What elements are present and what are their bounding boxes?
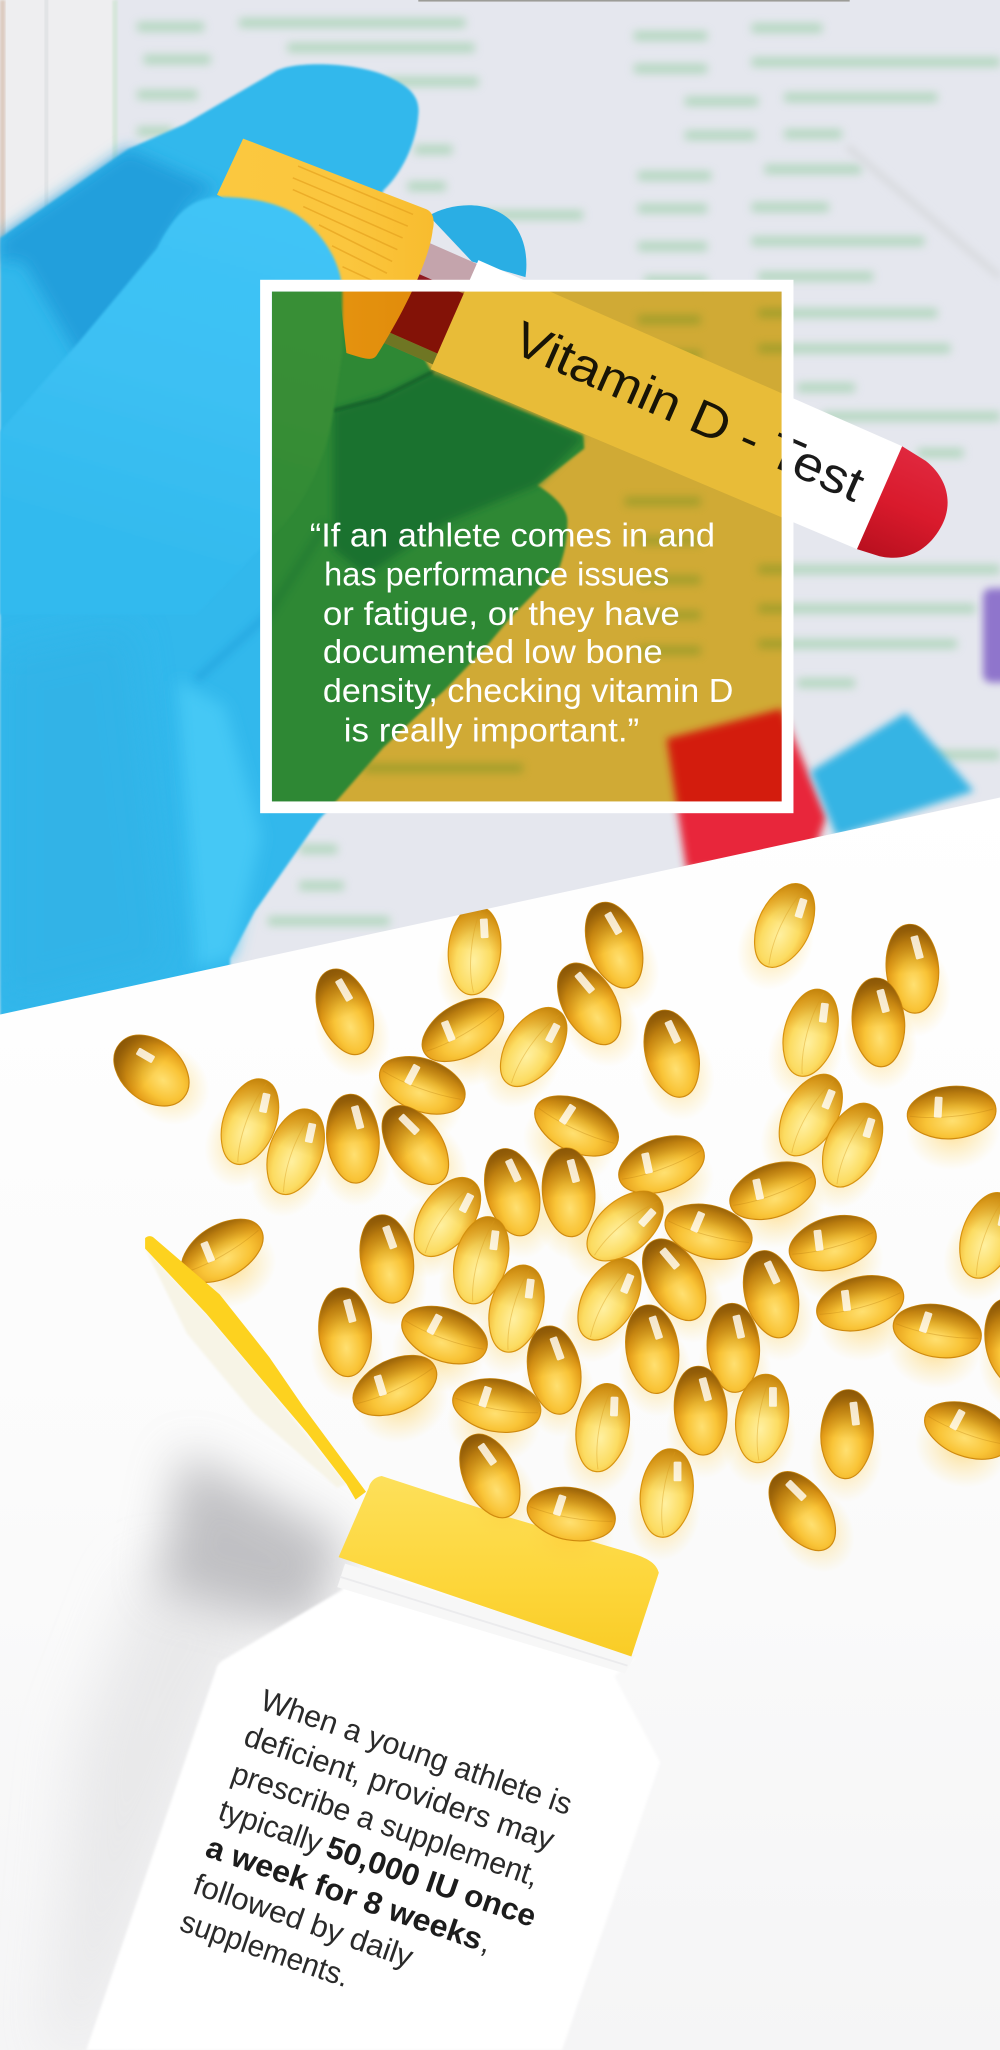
label text: Vitamin D - Test: [505, 312, 872, 513]
red tube end: [857, 446, 948, 558]
test tube with label: [384, 243, 948, 558]
glove shading: folds and highlights: [0, 149, 583, 1009]
quote text: or fatigue, or they have: [323, 596, 680, 633]
bottle body: [86, 1566, 660, 2050]
bottom panel: white surface: [0, 784, 1000, 2050]
vitamin D capsules: [95, 870, 1000, 1588]
top edge strip: [418, 0, 850, 2]
blue gloved hand: [0, 64, 584, 1020]
left paper margin: [0, 0, 118, 392]
quote text: is really important.”: [344, 712, 639, 749]
red tube cap: [667, 709, 826, 869]
quote text: has performance issues: [324, 557, 669, 594]
quote text: [310, 517, 733, 749]
thumb over cap: [0, 197, 342, 614]
back finger behind tube: [429, 205, 526, 277]
lab report background: [115, 0, 1000, 964]
bottle label text: When a young athlete is: [256, 1682, 577, 1822]
bottle label text: prescribe a supplement,: [227, 1755, 544, 1893]
bottle neck ridges: [337, 1564, 635, 1673]
bottle label text: typically: [214, 1792, 328, 1860]
bottle shadow on surface: [52, 1451, 345, 2050]
white tube label: [431, 260, 902, 555]
quote text: documented low bone: [323, 634, 663, 671]
vitamin D bottle with yellow cap: [86, 1476, 660, 2050]
yellow tube cap: [217, 139, 434, 359]
yellow multiply overlay in quote box: [272, 292, 782, 803]
glass and blood: [384, 243, 477, 364]
bottle label text: supplements.: [176, 1903, 354, 1994]
top panel: lab photo clipped by diagonal: [0, 0, 1000, 1020]
quote text: density, checking vitamin D: [323, 673, 733, 710]
purple tube cap: [983, 588, 1000, 682]
quote text: “If an athlete comes in and: [310, 517, 715, 554]
bottle label text: 50,000 IU once: [322, 1829, 541, 1934]
bottle label text: [176, 1681, 579, 2045]
quote box white frame: [266, 286, 788, 807]
bottle cap: [339, 1476, 659, 1656]
open cap lid flap: [145, 1236, 366, 1500]
cap ridges: [293, 166, 413, 285]
bottle label text: a week for 8 weeks: [202, 1829, 487, 1957]
bottle label text: followed by daily: [189, 1866, 418, 1975]
blurred green report rows: [137, 18, 1000, 926]
bottle label text: ,: [477, 1924, 497, 1960]
blurred pen on report: [847, 146, 1000, 277]
blue tube cap: [810, 713, 974, 837]
bottle label text: deficient, providers may: [240, 1718, 560, 1857]
